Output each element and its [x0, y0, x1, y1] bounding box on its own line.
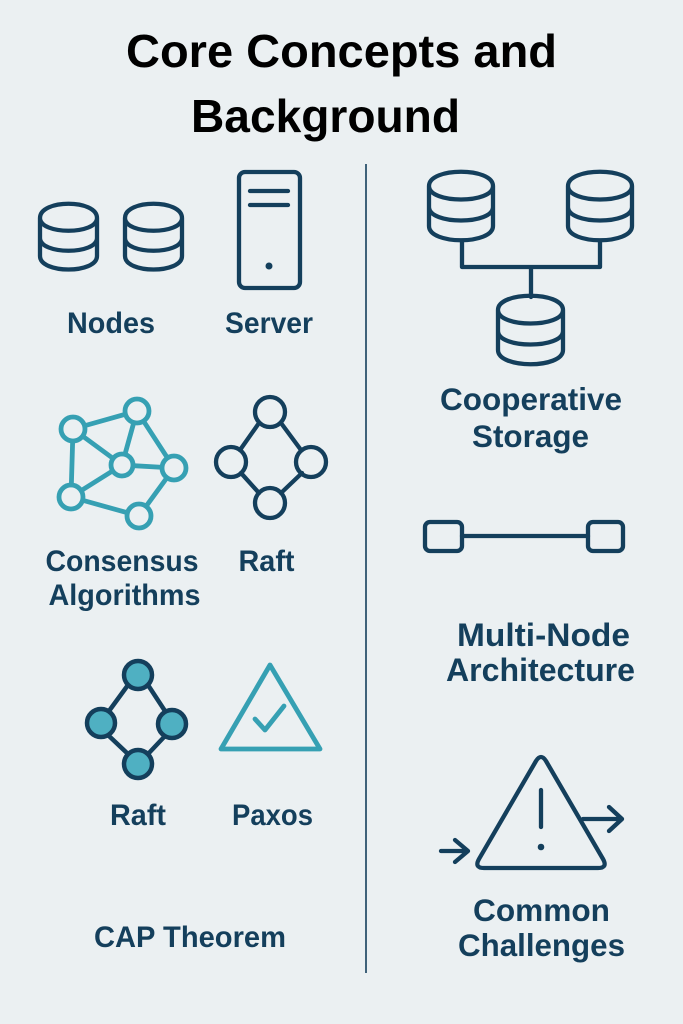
icon: warning triangle with arrows — [441, 757, 622, 868]
label: cooperative storage: Storage — [472, 418, 589, 454]
icon: server — [239, 172, 300, 288]
label: raft: Raft — [238, 545, 295, 578]
icon: nodes — [40, 204, 182, 270]
label: raft: Raft — [110, 799, 166, 832]
label: common challenges: Challenges — [458, 927, 625, 963]
label: paxos: Paxos — [232, 799, 313, 832]
icon: raft outline — [216, 397, 326, 518]
label: consensus algorithms — [46, 545, 200, 612]
title: Background — [191, 90, 460, 142]
icon: consensus network — [59, 399, 186, 528]
label: common challenges: Common — [473, 892, 610, 928]
icon: raft filled — [87, 661, 186, 778]
label: nodes: Nodes — [67, 307, 155, 340]
icon: cooperative storage — [429, 172, 632, 364]
label: consensus algorithms: Consensus — [46, 545, 198, 578]
label: consensus algorithms: Algorithms — [48, 579, 200, 612]
label: multi-node architecture: Architecture — [446, 652, 635, 688]
label: server: Server — [225, 307, 313, 340]
title: Core Concepts and — [126, 25, 557, 77]
label: cooperative storage — [440, 381, 622, 454]
label: cooperative storage: Cooperative — [440, 381, 622, 417]
label: multi-node architecture: Multi-Node — [457, 617, 630, 653]
title — [126, 25, 557, 142]
icon: multi-node link — [425, 522, 623, 551]
label: multi-node architecture — [446, 617, 635, 688]
label: common challenges — [458, 892, 625, 963]
label: cap theorem: CAP Theorem — [94, 921, 286, 954]
icon: paxos triangle — [221, 665, 320, 749]
center divider — [365, 164, 367, 973]
